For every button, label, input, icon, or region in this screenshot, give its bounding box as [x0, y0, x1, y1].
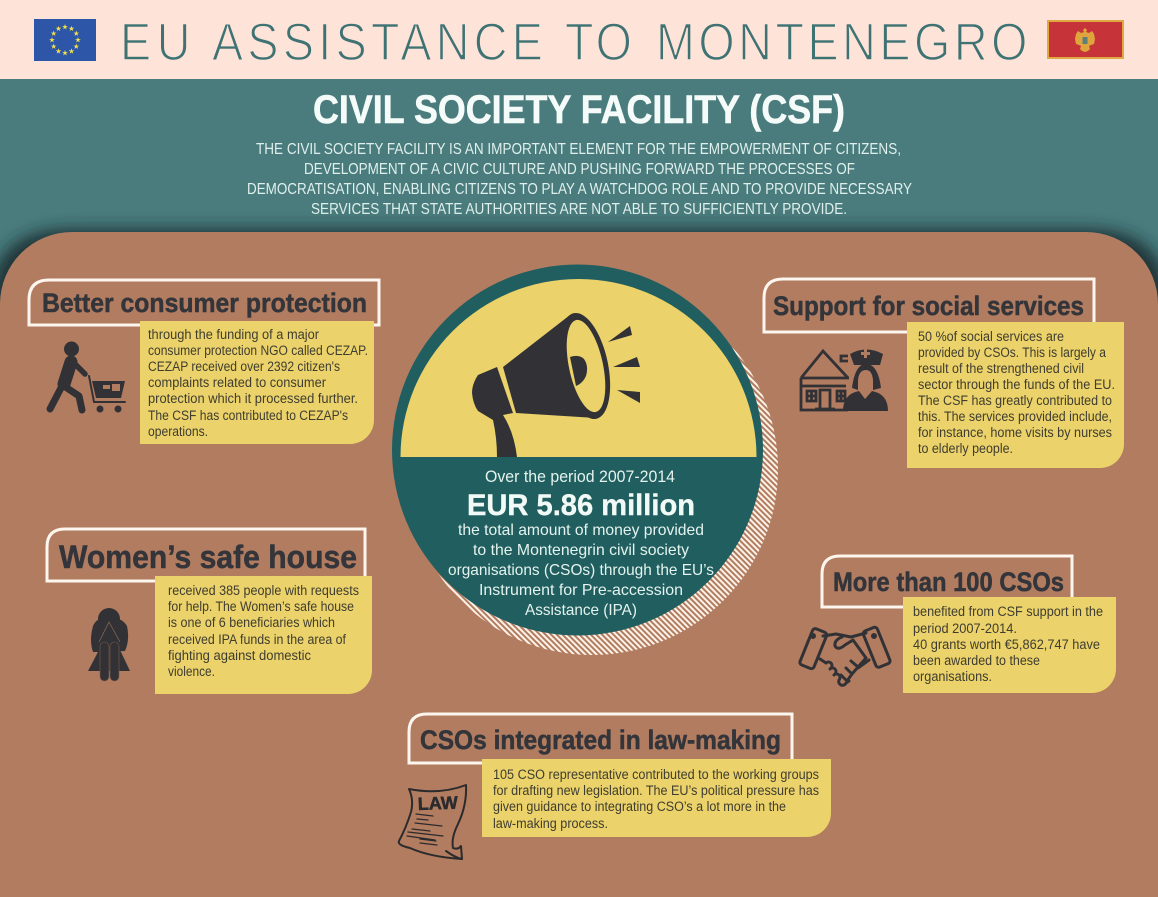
body text: consumer protection NGO called CEZAP. — [148, 343, 368, 358]
heading frame — [29, 280, 379, 325]
body text: to elderly people. — [918, 441, 1013, 456]
body text — [148, 327, 368, 439]
body text — [168, 583, 359, 679]
icon: law scroll — [399, 785, 466, 859]
body text: period 2007-2014. — [913, 621, 1017, 636]
heading frame — [764, 279, 1094, 332]
funding text: EUR 5.86 million — [467, 489, 695, 522]
central circle — [392, 264, 778, 655]
icon: crouching woman — [88, 608, 130, 681]
body text: through the funding of a major — [148, 327, 319, 342]
body text: operations. — [148, 424, 208, 439]
title: ASSISTANCE — [212, 12, 543, 72]
body text: 105 CSO representative contributed to the working groups — [493, 767, 819, 782]
body text — [918, 329, 1115, 456]
heading frame — [409, 714, 792, 763]
title: EU — [120, 12, 190, 72]
intro text: DEMOCRATISATION, ENABLING CITIZENS TO PLAY A WATCHDOG ROLE AND TO PROVIDE NECESSARY — [247, 181, 912, 198]
icon: EU flag — [34, 19, 96, 61]
body text: violence. — [168, 664, 215, 679]
body text: CEZAP received over 2392 citizen's — [148, 359, 340, 374]
heading: Better consumer protection — [42, 288, 367, 318]
body text: for instance, home visits by nurses — [918, 425, 1112, 440]
body text — [493, 767, 819, 831]
body text: for help. The Women’s safe house — [168, 599, 354, 614]
text box — [140, 321, 374, 444]
funding text: to the Montenegrin civil society — [473, 542, 689, 559]
title — [120, 12, 1027, 72]
text box — [907, 322, 1124, 468]
panel: women's safe house — [47, 529, 372, 694]
intro text: DEVELOPMENT OF A CIVIC CULTURE AND PUSHING FORWARD THE PROCESSES OF — [304, 161, 855, 178]
funding text — [448, 468, 714, 619]
heading: More than 100 CSOs — [833, 567, 1064, 597]
icon: handshake — [799, 626, 891, 685]
funding text: organisations (CSOs) through the EU’s — [448, 562, 714, 579]
body text: fighting against domestic — [168, 648, 311, 663]
LAW lettering: LAW — [417, 793, 458, 814]
title: TO — [565, 12, 632, 72]
heading: Support for social services — [773, 291, 1084, 321]
intro text — [247, 141, 912, 218]
body text: given guidance to integrating CSO’s a lot more in the — [493, 799, 786, 814]
body text: been awarded to these — [913, 653, 1040, 668]
body text: protection which it processed further. — [148, 391, 358, 406]
heading frame — [47, 529, 365, 581]
body text: law-making process. — [493, 816, 608, 831]
body text: for drafting new legislation. The EU’s political pressure has — [493, 783, 819, 798]
text box — [155, 576, 372, 694]
body text: received 385 people with requests — [168, 583, 359, 598]
body text: 50 %of social services are — [918, 329, 1064, 344]
body text: result of the strengthened civil — [918, 361, 1084, 376]
heading frame — [822, 556, 1072, 607]
funding text: Assistance (IPA) — [525, 602, 637, 619]
brown main panel — [0, 229, 1158, 897]
body text: organisations. — [913, 669, 992, 684]
body text: The CSF has contributed to CEZAP's — [148, 408, 348, 423]
body text: provided by CSOs. This is largely a — [918, 345, 1106, 360]
body text: this. The services provided include, — [918, 409, 1112, 424]
text box — [903, 597, 1116, 693]
text box — [482, 759, 831, 837]
body text: sector through the funds of the EU. — [918, 377, 1115, 392]
panel: CSOs integrated in law-making — [399, 714, 831, 859]
icon: person with shopping cart — [50, 342, 125, 412]
funding text: Over the period 2007-2014 — [485, 468, 675, 486]
body text — [913, 604, 1103, 684]
icon: megaphone — [472, 308, 640, 457]
heading: CSOs integrated in law-making — [420, 725, 781, 755]
icon: house and nurse — [801, 349, 888, 411]
title: MONTENEGRO — [656, 12, 1027, 72]
body text: The CSF has greatly contributed to — [918, 393, 1112, 408]
body text: complaints related to consumer — [148, 375, 326, 390]
body text: is one of 6 beneficiaries which — [168, 615, 335, 630]
panel: support for social services — [764, 279, 1124, 468]
body text: 40 grants worth €5,862,747 have — [913, 637, 1100, 652]
intro text: SERVICES THAT STATE AUTHORITIES ARE NOT ABLE TO SUFFICIENTLY PROVIDE. — [311, 201, 847, 218]
funding text: the total amount of money provided — [458, 522, 704, 539]
intro text: THE CIVIL SOCIETY FACILITY IS AN IMPORTANT ELEMENT FOR THE EMPOWERMENT OF CITIZENS, — [256, 141, 901, 158]
funding text: Instrument for Pre-accession — [479, 582, 683, 599]
heading: Women’s safe house — [59, 539, 357, 575]
body text: received IPA funds in the area of — [168, 632, 346, 647]
icon: Montenegro flag — [1048, 21, 1123, 58]
panel: better consumer protection — [29, 280, 379, 444]
panel: more than 100 CSOs — [799, 556, 1116, 693]
teal intro band — [0, 79, 1158, 329]
body text: benefited from CSF support in the — [913, 604, 1103, 619]
header band — [0, 0, 1158, 79]
section heading: CIVIL SOCIETY FACILITY (CSF) — [313, 88, 845, 132]
